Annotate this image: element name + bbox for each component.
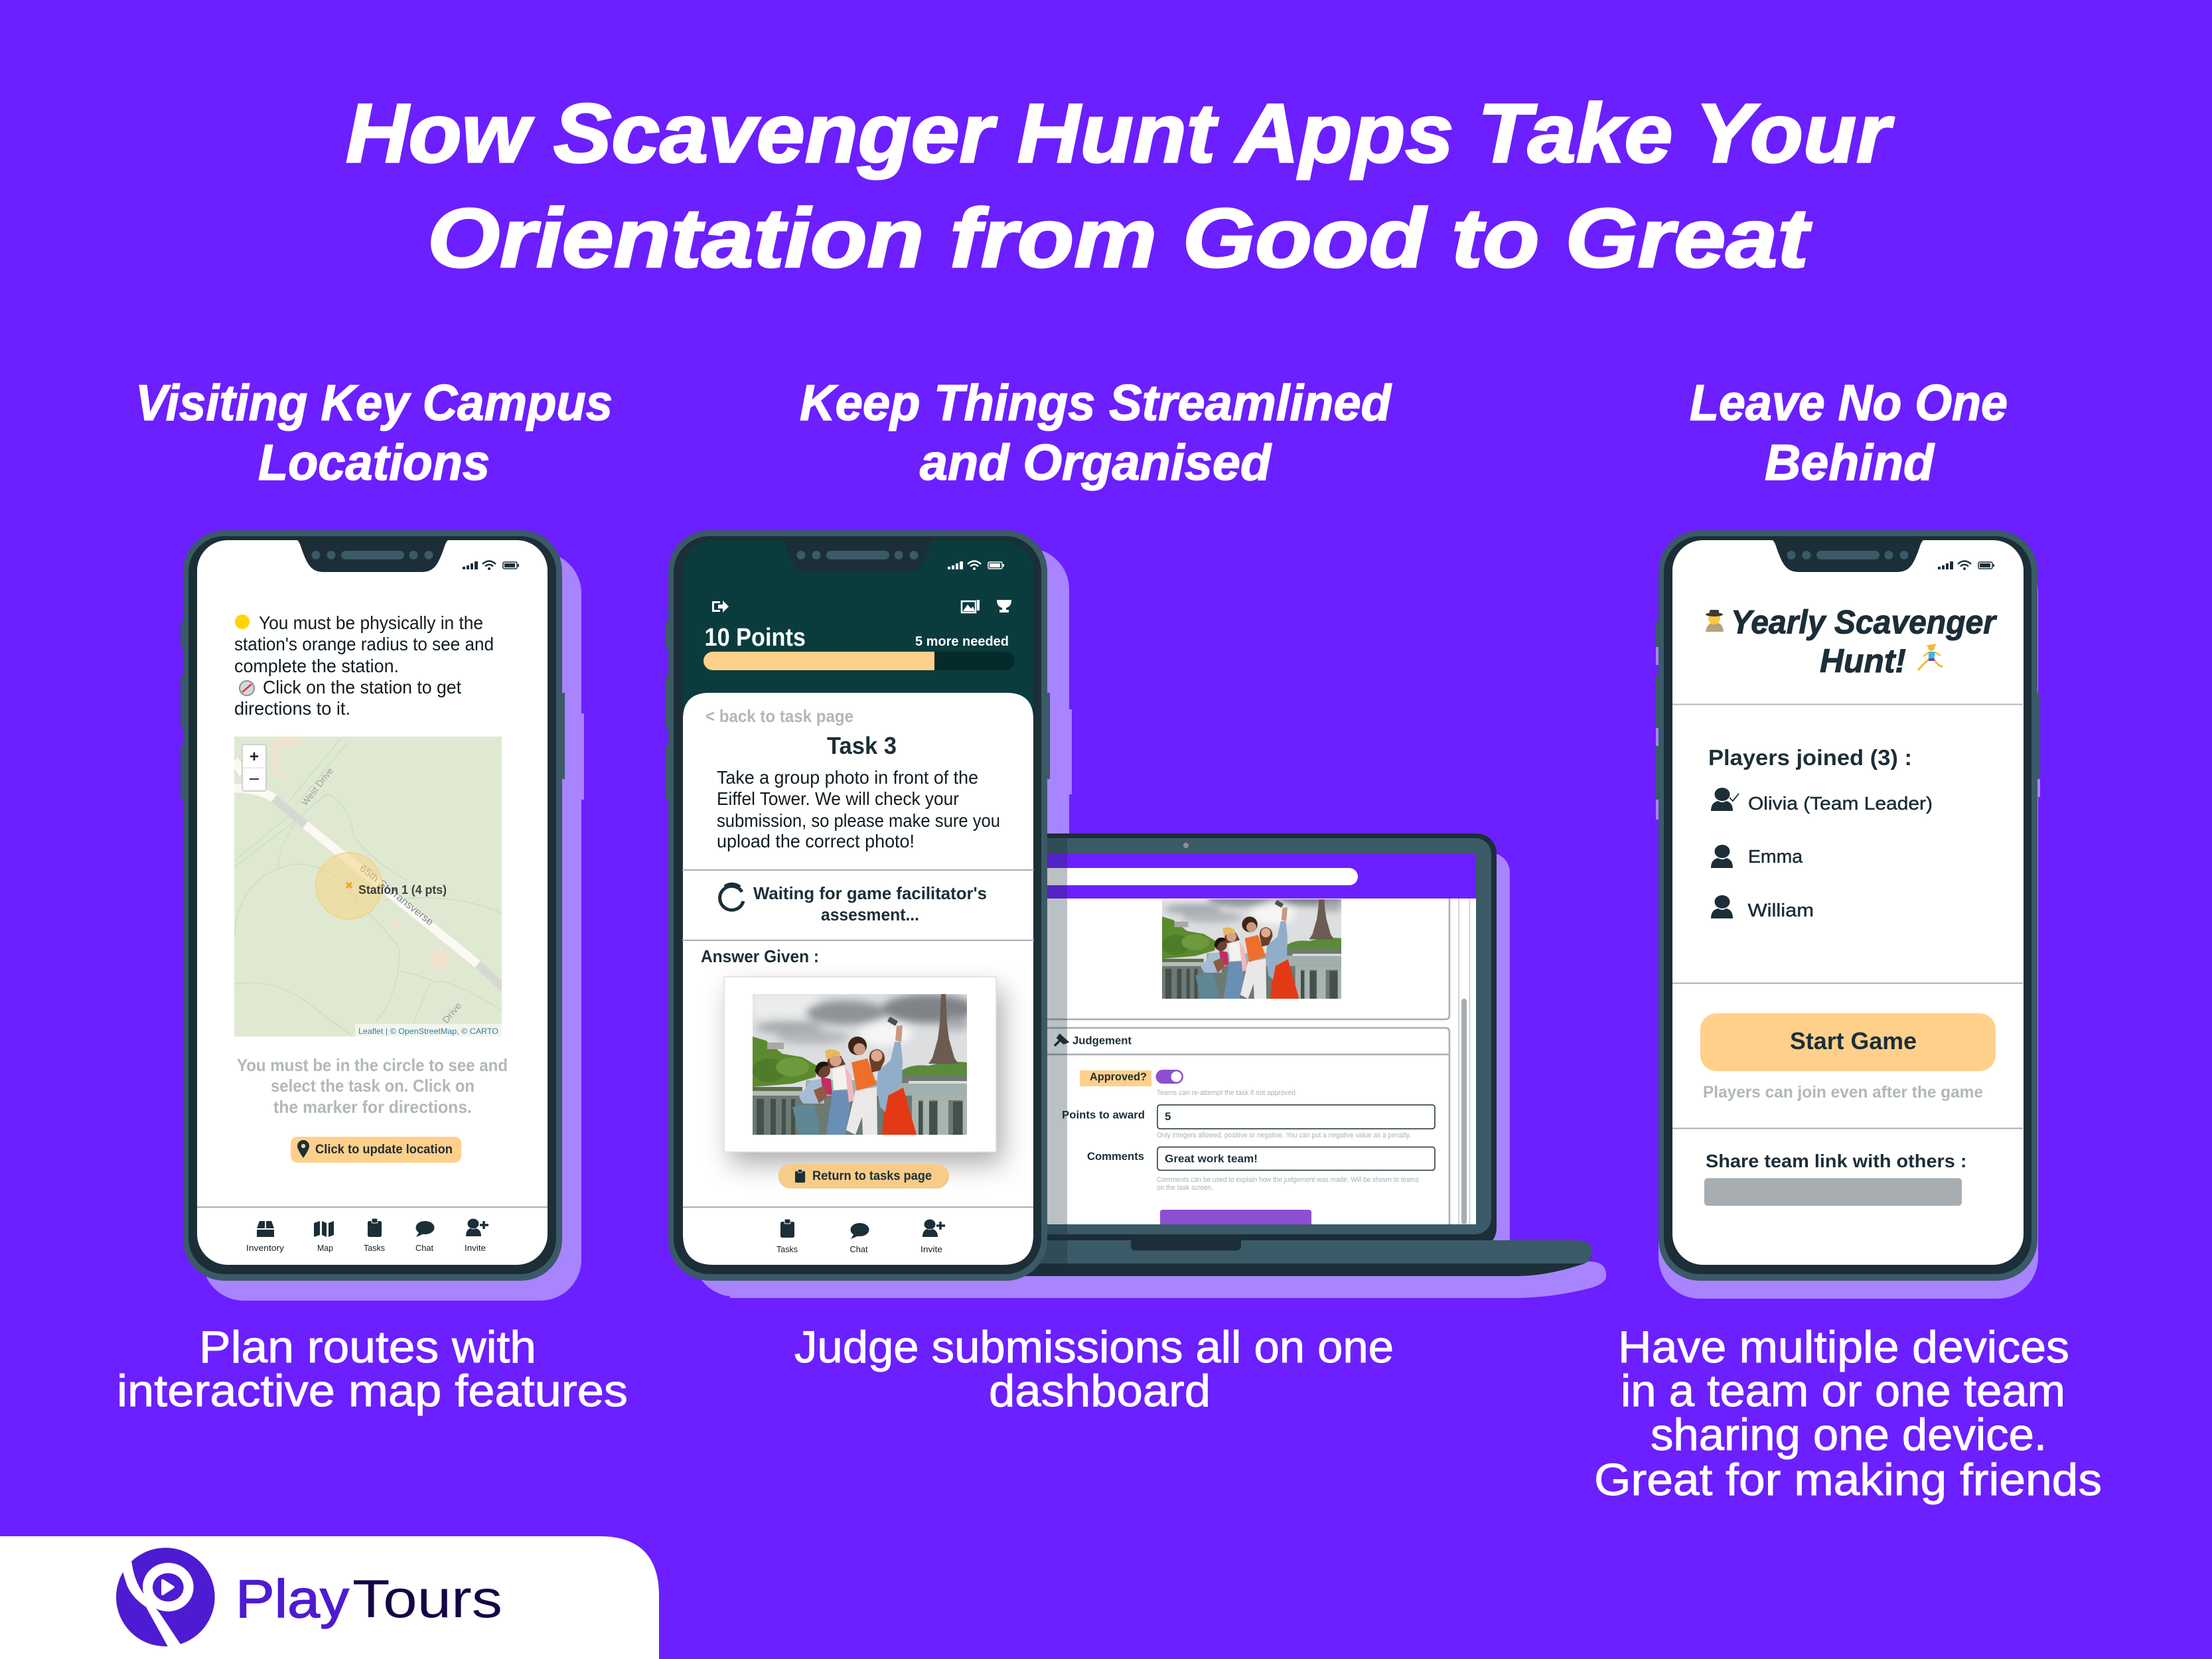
task description: upload the correct photo! [717,831,915,851]
bottom navigation: Tasks [776,1244,798,1254]
caption: multiple devices: Have multiple devices [1618,1322,2069,1372]
heading: leave no one behind: Leave No One [1690,375,2008,431]
judgement heading: Judgement [1072,1034,1132,1047]
phone 2 shadow [694,548,1072,1297]
button: update location [291,1137,461,1163]
player: olivia [1711,788,1933,814]
points counter: 10 Points [705,624,806,652]
button: return to tasks [778,1164,949,1189]
caption: plan routes: Plan routes with [199,1322,536,1372]
map attribution [355,1024,502,1037]
player: emma [1711,845,1803,868]
submit button [1160,1210,1311,1224]
comments field [1087,1147,1435,1171]
task card [682,693,1034,1265]
join hint: Players can join even after the game [1703,1083,1983,1102]
submission panel border [1047,899,1451,1021]
phone 3: lobby screen [1656,530,2040,1299]
phone 1 frame [181,530,565,1281]
phone 2: task screen [666,530,1050,1281]
caption: plan routes [117,1322,628,1416]
phone 1: map screen [181,530,584,1301]
player: olivia: Olivia (Team Leader) [1748,793,1933,814]
comments hint: on the task screen. [1157,1184,1213,1192]
map: West Drive [299,765,335,808]
zoom control [242,745,266,791]
waiting status [720,883,987,924]
grey helper text: the marker for directions. [273,1097,472,1117]
logo wordmark: Tours [352,1569,502,1629]
caption: multiple devices: sharing one device. [1651,1409,2047,1460]
player: william [1711,895,1814,920]
map [234,737,504,1037]
laptop shadow [730,853,1606,1298]
phone 3 shadow [1656,551,2040,1299]
caption: multiple devices: in a team or one team [1621,1366,2065,1416]
bottom navigation [776,1219,945,1254]
map: 65th St Transverse [358,863,435,928]
laptop: judging dashboard [730,833,1606,1298]
task description: Take a group photo in front of the [717,767,978,788]
marker and station label: Station 1 (4 pts) [358,883,447,897]
title [346,86,1894,285]
share link box [1704,1178,1962,1206]
waiting status: Waiting for game facilitator's [753,883,987,903]
caption: judge submissions: Judge submissions all on one [794,1322,1394,1372]
answer label: Answer Given : [701,946,819,966]
judgement panel border [1047,1027,1451,1224]
heading: visiting key campus locations [135,375,613,491]
icon: yellow circle [235,614,250,629]
player: emma: Emma [1748,846,1803,867]
caption: plan routes: interactive map features [117,1366,628,1416]
submitted photo [1162,899,1341,999]
phone 2 frame [666,530,1050,1281]
points field [1062,1105,1435,1129]
icon: compass [240,681,254,695]
approved hint: Teams can re-attempt the task if not approved [1157,1089,1295,1097]
bottom navigation: Chat [849,1244,868,1254]
points hint: Only integers allowed, positive or negative. You can put a negative value as a penalty. [1157,1131,1411,1139]
bottom navigation: Invite [921,1244,942,1254]
caption: multiple devices [1594,1322,2102,1505]
points needed: 5 more needed [915,634,1009,649]
comments field: Comments [1087,1150,1144,1163]
button: start game [1700,1013,1996,1071]
player: william: William [1748,900,1814,920]
logo wordmark: Play [236,1569,350,1629]
laptop lid [995,833,1497,1248]
radius circle [316,853,382,919]
icon: detective emoji [1706,610,1724,632]
comments hint [1157,1177,1419,1190]
grey helper text [237,1055,508,1117]
screen header [1047,853,1476,899]
task description: Eiffel Tower. We will check your [717,788,959,809]
map attribution: Leaflet | © OpenStreetMap, © CARTO [358,1027,498,1036]
phone 3 frame [1656,530,2040,1281]
heading: visiting key campus locations: Visiting Key Campus [135,375,613,431]
points field: 5 [1165,1110,1171,1123]
comments field: Great work team! [1165,1152,1258,1165]
instructions text: Click on the station to get [263,677,461,697]
task description [717,767,1000,851]
waiting status: assesment... [821,904,919,924]
instructions text: station's orange radius to see and [234,634,494,654]
bottom navigation: Invite [465,1243,486,1253]
button: update location: Click to update location [315,1143,453,1157]
players heading: Players joined (3) : [1708,745,1912,770]
progress bar [703,652,1015,670]
game title [1731,604,1997,680]
heading: keep things streamlined and organised: and Organised [920,435,1272,491]
approved toggle: Approved? [1090,1070,1147,1083]
icon: runner emoji [1918,644,1943,670]
grey helper text: select the task on. Click on [271,1076,475,1096]
logo wordmark [236,1569,502,1629]
bottom navigation: Map [317,1243,333,1253]
button: return to tasks: Return to tasks page [812,1169,932,1183]
caption: judge submissions: dashboard [989,1366,1211,1416]
task title: Task 3 [827,732,897,759]
task description: submission, so please make sure you [717,810,1000,831]
back link: < back to task page [705,706,853,726]
game title: Yearly Scavenger [1731,604,1997,641]
heading: leave no one behind [1690,375,2008,491]
instructions text [234,613,494,719]
title: How Scavenger Hunt Apps Take Your [346,86,1894,180]
bottom navigation: Tasks [364,1243,385,1253]
title: Orientation from Good to Great [427,191,1812,285]
divider [197,1206,548,1208]
logo panel [0,1536,659,1659]
bottom navigation [246,1218,488,1253]
laptop screen [1047,853,1476,1224]
header icons [712,600,1011,613]
laptop base [995,1240,1592,1276]
bottom navigation: Chat [415,1243,433,1253]
instructions text: complete the station. [234,656,399,676]
zoom control: + [250,748,259,766]
phone 2 header [683,539,1033,739]
caption: judge submissions [794,1322,1394,1416]
phone cast shadow on laptop [995,835,1067,1276]
heading: visiting key campus locations: Locations [258,435,490,491]
bottom navigation: Inventory [246,1243,285,1253]
grey helper text: You must be in the circle to see and [237,1055,508,1075]
photo card [724,977,1003,1164]
map: Drive [440,1000,464,1025]
heading: keep things streamlined and organised: Keep Things Streamlined [800,375,1392,431]
caption: multiple devices: Great for making friends [1594,1455,2102,1505]
game title: Hunt! [1820,642,1906,680]
heading: keep things streamlined and organised [800,375,1392,491]
phone 1 shadow [202,552,584,1301]
points field: Points to award [1062,1108,1145,1121]
scrollbar [1459,899,1469,1224]
approved toggle [1080,1070,1183,1086]
share label: Share team link with others : [1706,1151,1967,1171]
comments hint: Comments can be used to explain how the judgement was made. Will be shown to teams [1157,1176,1419,1184]
button: start game: Start Game [1790,1027,1917,1054]
icon: playtours logo [116,1548,215,1650]
heading: leave no one behind: Behind [1765,435,1935,491]
instructions text: directions to it. [234,698,350,719]
instructions text: You must be physically in the [259,613,483,633]
